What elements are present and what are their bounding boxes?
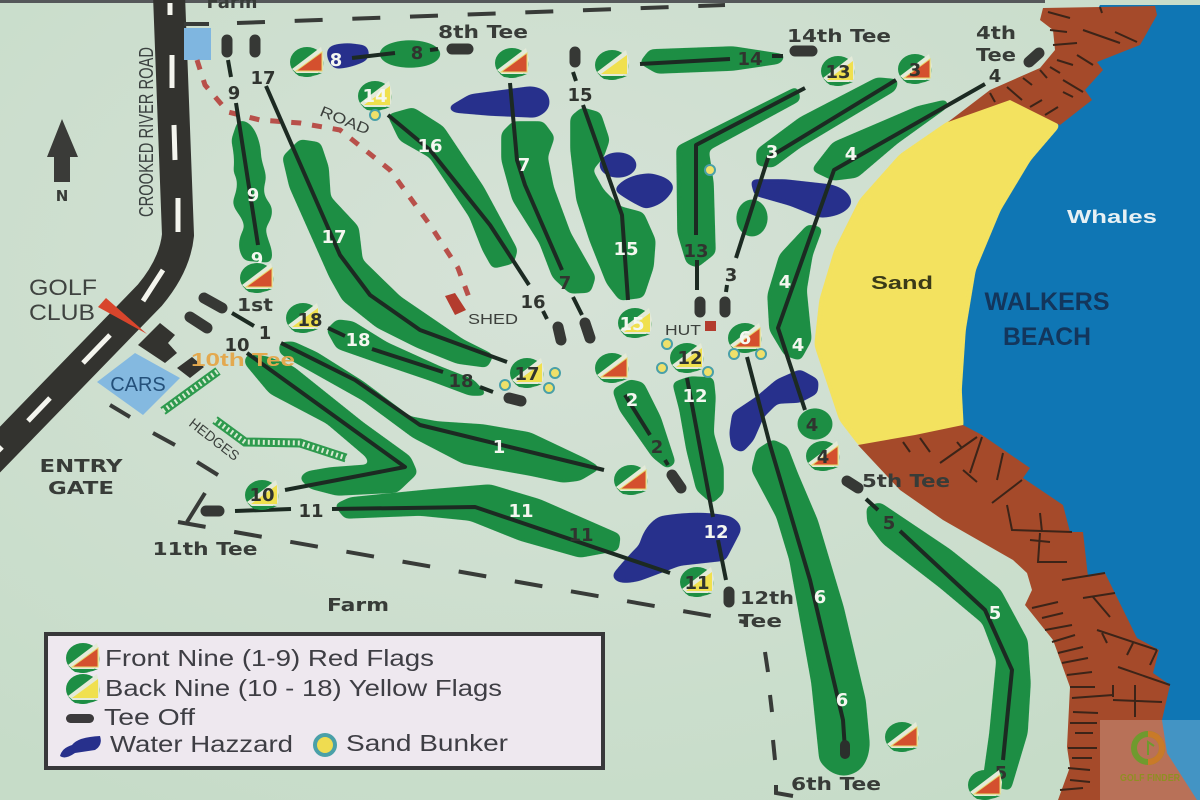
hole flags: 3 <box>909 60 921 81</box>
hole flags: 15 <box>619 314 645 335</box>
hole 6: 6 <box>814 587 826 608</box>
map labels: 10th Tee <box>191 350 295 370</box>
hole 9 <box>228 60 271 270</box>
map labels: 11th Tee <box>152 539 258 560</box>
hole 12: 12 <box>682 386 708 407</box>
hole 12: 12 <box>703 522 729 543</box>
hole 16: 16 <box>417 136 443 157</box>
hole flags: 13 <box>825 62 851 83</box>
hole flags: 10 <box>249 485 275 506</box>
hole 14: 14 <box>737 49 763 70</box>
hole 9: 9 <box>228 83 240 104</box>
map labels: 8th Tee <box>438 22 528 43</box>
road: Crooked River Road <box>0 0 178 465</box>
hole flags: 6 <box>739 328 751 349</box>
hole 3 <box>725 78 898 292</box>
map labels: 6th Tee <box>791 774 881 795</box>
hole 2: 2 <box>651 437 663 458</box>
ocean <box>950 5 1200 800</box>
property boundary dashes <box>110 5 793 796</box>
hole 8 <box>330 41 440 71</box>
legend: Tee Off <box>104 704 196 730</box>
map labels: Farm <box>327 595 389 616</box>
top edge rule <box>0 0 1045 3</box>
hole 17: 17 <box>321 227 347 248</box>
hole 16: 16 <box>520 292 546 313</box>
hole flags: 4 <box>817 447 829 468</box>
hole 8: 8 <box>330 50 342 71</box>
hole 2 <box>613 380 675 468</box>
hole 7: 7 <box>559 273 571 294</box>
hedges: HEDGES <box>186 415 243 464</box>
shed <box>445 293 466 315</box>
map labels: ROAD <box>317 103 372 139</box>
hole 3: 3 <box>766 142 778 163</box>
map labels: HUT <box>665 322 701 339</box>
hole 16 <box>388 108 547 319</box>
water hazards <box>328 44 851 582</box>
car park entrance box <box>184 28 211 60</box>
sand <box>815 100 1060 446</box>
hole 10: 10 <box>224 335 250 356</box>
red flag pointer <box>98 298 147 334</box>
hole 15: 15 <box>613 239 639 260</box>
hole 10 <box>224 335 417 495</box>
beach labels: Whales <box>1067 207 1157 227</box>
map labels: Tee <box>738 611 782 632</box>
map labels: 1st <box>237 295 273 316</box>
map labels: 12th <box>740 588 794 609</box>
hole 4: 4 <box>989 66 1001 87</box>
map labels: ENTRY <box>40 456 124 477</box>
car park <box>97 353 180 415</box>
hole 4: 4 <box>845 144 857 165</box>
north arrow <box>47 119 78 205</box>
hole 7 <box>502 83 595 315</box>
hole 6 <box>747 357 869 775</box>
legend: Sand Bunker <box>346 730 508 756</box>
map labels: SHED <box>468 311 518 328</box>
hole 18: 18 <box>345 330 371 351</box>
tee markers <box>190 40 1039 602</box>
legend: Water Hazzard <box>110 731 293 757</box>
clubhouse buildings <box>138 323 204 378</box>
hole 12 <box>673 377 729 580</box>
hole 1: 1 <box>259 323 271 344</box>
hole 4 <box>768 66 1001 439</box>
map labels: Tee <box>976 45 1016 66</box>
hole 18 <box>327 320 493 395</box>
golf club label: GOLF <box>29 275 97 300</box>
beach labels: BEACH <box>1003 323 1091 351</box>
hole 17: 17 <box>250 68 276 89</box>
map labels: GATE <box>48 478 114 499</box>
hole 3: 3 <box>725 265 737 286</box>
hedges <box>163 371 346 464</box>
map labels: 5th Tee <box>862 471 950 492</box>
legend: Back Nine (10 - 18) Yellow Flags <box>105 675 502 701</box>
north arrow: N <box>56 187 68 205</box>
hole 11: 11 <box>298 501 324 522</box>
hole 15: 15 <box>567 85 593 106</box>
map labels: 14th Tee <box>787 26 891 47</box>
hole flags: 18 <box>297 310 323 331</box>
hole 5: 5 <box>995 763 1007 784</box>
cliffs north <box>948 6 1157 125</box>
hole 15 <box>567 72 655 300</box>
hole 2: 2 <box>626 390 638 411</box>
hole 7: 7 <box>518 155 530 176</box>
watermark: Golf Finder: GOLF FINDER <box>1120 773 1181 784</box>
hole 11: 11 <box>508 501 534 522</box>
sand bunkers <box>370 110 766 393</box>
hole flags: 14 <box>362 86 388 107</box>
legend: Front Nine (1-9) Red Flags <box>105 645 434 671</box>
hole 4: 4 <box>792 335 804 356</box>
hut <box>705 321 716 331</box>
hole flags: 12 <box>677 348 703 369</box>
hole flags: 11 <box>684 573 710 594</box>
hole 18: 18 <box>448 371 474 392</box>
hole flags: 17 <box>514 364 540 385</box>
beach labels <box>871 207 1157 351</box>
legend <box>46 634 603 768</box>
beach labels: Sand <box>871 273 933 293</box>
hole 8: 8 <box>411 43 423 64</box>
hole flags <box>240 47 1002 800</box>
hole 9: 9 <box>251 249 263 270</box>
hole 13: 13 <box>683 241 709 262</box>
golf club label: CLUB <box>29 300 95 325</box>
hole 9: 9 <box>247 185 259 206</box>
hole 1 <box>232 313 604 482</box>
hole 17 <box>250 68 507 367</box>
hole 14 <box>640 47 785 73</box>
cliffs south <box>858 425 1197 800</box>
beach labels: WALKERS <box>984 288 1110 316</box>
hole 13 <box>677 87 805 290</box>
red dashed road <box>197 60 470 300</box>
hole 5: 5 <box>883 513 895 534</box>
hole 4: 4 <box>779 272 791 293</box>
hole 5: 5 <box>989 603 1001 624</box>
hole 5 <box>866 499 1030 790</box>
car park: CARS <box>110 374 166 396</box>
hole 1: 1 <box>493 437 505 458</box>
watermark: Golf Finder <box>1100 720 1200 800</box>
hole 11 <box>235 485 670 573</box>
map labels: 4th <box>976 23 1016 44</box>
golf club label <box>29 275 97 325</box>
hole 11: 11 <box>568 525 594 546</box>
hole 4: 4 <box>806 415 818 436</box>
hole 6: 6 <box>836 690 848 711</box>
